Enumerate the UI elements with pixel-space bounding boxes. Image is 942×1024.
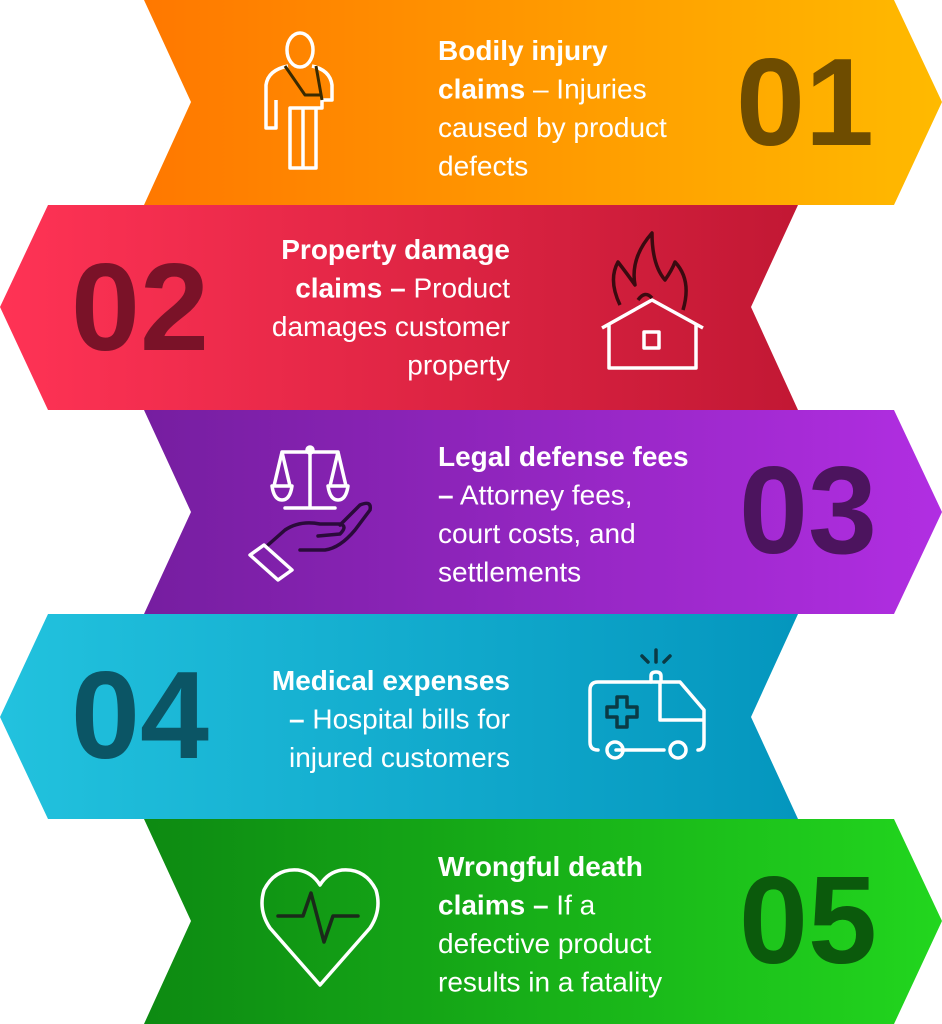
- icon: ambulance: [590, 650, 704, 758]
- text: wrongful death: defective product: [438, 928, 651, 959]
- text: legal defense: Legal defense fees: [438, 441, 689, 472]
- text: property damage: property: [407, 350, 510, 380]
- text: bodily injury: Bodily injury: [438, 35, 608, 66]
- panel 02: property damage: [0, 205, 798, 410]
- text: legal defense: –: [438, 480, 454, 510]
- icon: heart with pulse: [262, 870, 378, 985]
- number 03: 03: [739, 442, 877, 580]
- number 05: 05: [739, 852, 877, 990]
- text: bodily injury: defects: [438, 150, 528, 182]
- panel 04: medical expenses: [0, 614, 798, 819]
- text: medical expenses: Medical expenses: [272, 665, 510, 696]
- text: property damage: claims – Product: [295, 272, 510, 304]
- number 02: 02: [71, 239, 209, 377]
- text: bodily injury: – Injuries: [525, 74, 647, 104]
- icon: injured person: [266, 33, 332, 168]
- number 01: 01: [736, 34, 874, 172]
- panel 03: legal defense: [144, 410, 942, 614]
- text: legal defense: court costs, and: [438, 518, 636, 549]
- text: wrongful death: Wrongful death: [438, 851, 643, 882]
- text: wrongful death: If a: [549, 890, 596, 920]
- icon: scales in hand: [250, 447, 370, 580]
- text: wrongful death: claims –: [438, 890, 549, 920]
- text: property damage: damages customer: [272, 311, 510, 342]
- text: legal defense: Attorney fees,: [454, 480, 633, 510]
- number 04: 04: [71, 647, 209, 785]
- text: medical expenses: – Hospital bills for: [289, 704, 510, 734]
- text: legal defense: settlements: [438, 556, 581, 588]
- text: medical expenses: injured customers: [289, 742, 510, 773]
- text: bodily injury: claims: [438, 74, 525, 104]
- text: wrongful death: results in a fatality: [438, 966, 662, 998]
- text: bodily injury: caused by product: [438, 112, 667, 143]
- panel 05: wrongful death: [144, 819, 942, 1024]
- icon: house on fire: [602, 233, 703, 368]
- text: property damage: Property damage: [281, 234, 510, 265]
- panel 01: bodily injury: [144, 0, 942, 205]
